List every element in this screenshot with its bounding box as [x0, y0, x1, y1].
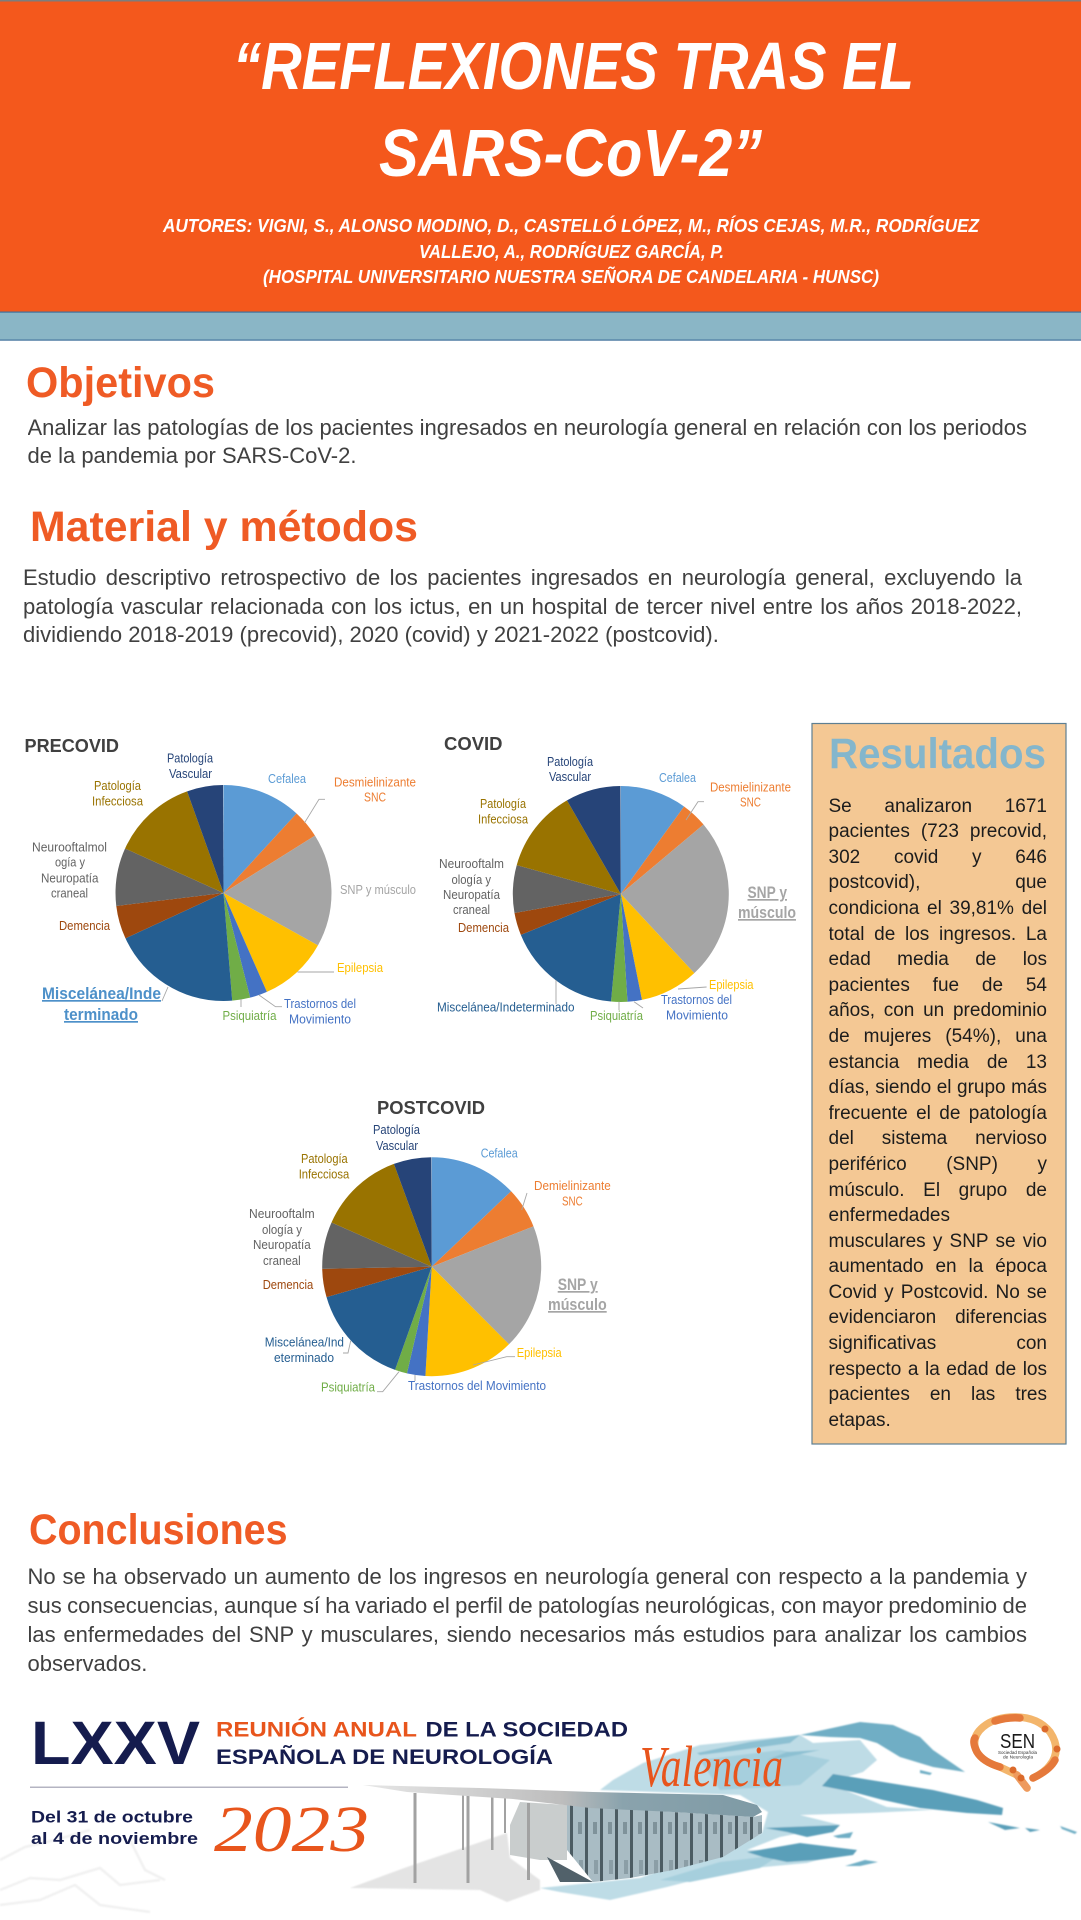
- text: resultados: años, con un predominio: [828, 1000, 1047, 1021]
- labels: covid: Infecciosa: [478, 813, 528, 827]
- text: resultados: del sistema nervioso: [828, 1128, 1047, 1149]
- text: objetivos: Analizar las patologías de los pacientes ingresados en neurología general en relación con los periodos: [28, 415, 1027, 440]
- text: resultados: postcovid), que: [828, 872, 1047, 893]
- labels: postcovid: Infecciosa: [299, 1168, 349, 1182]
- labels: precovid: Neurooftalmol: [32, 841, 107, 855]
- text: material y métodos: patología vascular relacionada con los ictus, en un hospital de tercer nivel entre los años 2018-2022,: [23, 594, 1022, 618]
- text: objetivos: [28, 414, 1027, 474]
- labels: covid: Neurooftalm: [439, 857, 504, 871]
- labels: precovid: Movimiento: [289, 1013, 351, 1027]
- text: conclusiones: [28, 1562, 1027, 1682]
- labels: covid: Trastornos del: [661, 993, 732, 1007]
- header banner: [0, 0, 1081, 341]
- text: resultados: estancia media de 13: [828, 1052, 1047, 1073]
- labels: postcovid: Demielinizante: [534, 1179, 611, 1193]
- labels: precovid: Vascular: [169, 767, 212, 781]
- text: conclusiones: sus consecuencias, aunque sí ha variado el perfil de patologías neurológicas, con mayor predominio de: [28, 1593, 1027, 1618]
- labels: precovid: Epilepsia: [337, 961, 383, 975]
- labels: precovid: Cefalea: [268, 772, 306, 786]
- chart title: postcovid: POSTCOVID: [377, 1097, 485, 1118]
- labels: precovid: Demencia: [59, 919, 110, 933]
- labels: covid: ología y: [452, 873, 492, 887]
- text: resultados: etapas.: [828, 1410, 891, 1431]
- text: resultados: 302 covid y 646: [828, 847, 1047, 868]
- labels: precovid: craneal: [51, 887, 88, 901]
- heading: Conclusiones: Conclusiones: [29, 1506, 288, 1554]
- labels: postcovid: Patología: [301, 1152, 348, 1166]
- dates: Del 31 de octubre: [31, 1808, 193, 1827]
- text: resultados: condiciona el 39,81% del: [828, 898, 1047, 919]
- decorative grey veins: [0, 1830, 165, 1912]
- text: resultados: respecto a la edad de los: [828, 1359, 1047, 1380]
- labels: precovid: SNP y músculo: [340, 883, 416, 897]
- text: conclusiones: observados.: [28, 1651, 147, 1676]
- labels: postcovid: ología y: [262, 1223, 303, 1237]
- chart title: covid: COVID: [444, 733, 502, 754]
- logo: SEN: [974, 1717, 1060, 1788]
- labels: covid: SNC: [740, 796, 761, 810]
- labels: postcovid: SNP y: [558, 1275, 598, 1294]
- text: material y métodos: Estudio descriptivo retrospectivo de los pacientes ingresados en neurología general, excluyendo la: [23, 565, 1022, 590]
- labels: postcovid: Psiquiatría: [321, 1381, 375, 1395]
- authors and hospital: [162, 215, 980, 287]
- labels: precovid: Psiquiatría: [222, 1009, 277, 1023]
- labels: postcovid: SNC: [562, 1195, 583, 1209]
- text: resultados: evidenciaron diferencias: [828, 1307, 1047, 1328]
- text: conclusiones: las enfermedades del SNP y musculares, siendo necesarios más estudios para analizar los cambios: [28, 1622, 1027, 1647]
- meeting name: REUNIÓN ANUAL: [216, 1718, 417, 1742]
- authors and hospital: VALLEJO, A., RODRÍGUEZ GARCÍA, P.: [419, 241, 724, 262]
- text: resultados: edad media de los: [828, 949, 1047, 970]
- labels: postcovid: craneal: [263, 1254, 301, 1268]
- text: resultados: músculo. El grupo de: [828, 1180, 1047, 1200]
- labels: covid: [437, 755, 796, 1023]
- labels: covid: SNP y: [748, 883, 787, 902]
- labels: postcovid: Neurooftalm: [249, 1207, 315, 1221]
- labels: covid: Patología: [480, 797, 526, 811]
- labels: precovid: Desmielinizante: [334, 776, 416, 790]
- labels: covid: Demencia: [458, 921, 509, 935]
- labels: covid: Neuropatía: [443, 888, 500, 902]
- text: resultados: pacientes (723 precovid,: [828, 821, 1047, 842]
- labels: covid: Psiquiatría: [590, 1009, 643, 1023]
- text: resultados: enfermedades: [828, 1205, 950, 1226]
- authors and hospital: AUTORES: VIGNI, S., ALONSO MODINO, D., CASTELLÓ LÓPEZ, M., RÍOS CEJAS, M.R., RODRÍGUEZ: [162, 215, 980, 236]
- heading: Objetivos: Objetivos: [26, 359, 215, 407]
- LXXV: LXXV: [31, 1709, 200, 1777]
- text: resultados: [828, 794, 1047, 1439]
- pie slices: covid: [567, 840, 675, 948]
- logo: SEN: de Neurología: [1003, 1754, 1034, 1760]
- text: resultados: de mujeres (54%), una: [828, 1026, 1047, 1047]
- labels: postcovid: Cefalea: [481, 1147, 518, 1161]
- heading: Resultados: Resultados: [829, 730, 1046, 778]
- labels: covid: Desmielinizante: [710, 781, 791, 795]
- meeting name: ESPAÑOLA DE NEUROLOGÍA: [216, 1746, 553, 1769]
- pie slices: precovid: [170, 839, 278, 947]
- labels: covid: Patología: [547, 755, 593, 769]
- labels: precovid: [32, 752, 416, 1027]
- leader lines: covid: [556, 802, 707, 1010]
- panel: resultados: [812, 724, 1066, 1444]
- logo: SEN: Sociedad Española: [998, 1750, 1037, 1755]
- labels: precovid: Patología: [94, 779, 141, 793]
- labels: covid: Epilepsia: [709, 978, 754, 992]
- dates: [31, 1808, 198, 1848]
- meeting name: DE LA SOCIEDAD: [426, 1719, 628, 1742]
- text: resultados: musculares y SNP se vio: [828, 1231, 1047, 1252]
- text: objetivos: de la pandemia por SARS-CoV-2.: [28, 443, 356, 468]
- text: resultados: periférico (SNP) y: [828, 1154, 1047, 1175]
- labels: precovid: Patología: [167, 752, 213, 766]
- labels: covid: Cefalea: [659, 771, 696, 785]
- labels: precovid: Miscelánea/Inde: [42, 984, 161, 1003]
- labels: covid: Movimiento: [666, 1009, 728, 1023]
- heading: Material y métodos: Material y métodos: [30, 503, 418, 551]
- chart: postcovid pie: [249, 1097, 611, 1395]
- footer: congress banner: [0, 1709, 1077, 1912]
- title: SARS-CoV-2”: [379, 116, 762, 191]
- Valencia script: Valencia: [640, 1734, 783, 1799]
- labels: postcovid: Patología: [373, 1123, 420, 1137]
- labels: postcovid: Demencia: [263, 1278, 313, 1292]
- text: resultados: pacientes en las tres: [828, 1384, 1047, 1405]
- labels: precovid: Trastornos del: [284, 997, 356, 1011]
- text: resultados: pacientes fue de 54: [828, 975, 1047, 996]
- text: conclusiones: No se ha observado un aumento de los ingresos en neurología general con respecto a la pandemia y: [28, 1564, 1027, 1589]
- title: [233, 29, 914, 191]
- text: resultados: Covid y Postcovid. No se: [828, 1282, 1047, 1303]
- chart: precovid pie: [24, 735, 416, 1027]
- labels: postcovid: Miscelánea/Ind: [265, 1336, 344, 1350]
- text: resultados: frecuente el de patología: [828, 1103, 1047, 1124]
- labels: precovid: ogía y: [55, 856, 86, 870]
- labels: precovid: Infecciosa: [92, 794, 143, 808]
- text: resultados: significativas con: [828, 1333, 1047, 1354]
- title: “REFLEXIONES TRAS EL: [233, 29, 914, 104]
- text: material y métodos: [23, 564, 1022, 654]
- labels: precovid: Neuropatía: [41, 871, 99, 885]
- labels: postcovid: Neuropatía: [253, 1238, 311, 1252]
- text: resultados: días, siendo el grupo más: [828, 1077, 1047, 1098]
- labels: postcovid: [249, 1123, 611, 1395]
- labels: covid: craneal: [453, 903, 490, 917]
- labels: covid: Vascular: [549, 770, 591, 784]
- labels: postcovid: eterminado: [274, 1351, 334, 1365]
- text: material y métodos: dividiendo 2018-2019 (precovid), 2020 (covid) y 2021-2022 (postcovid).: [23, 622, 719, 647]
- watercolor wash: [540, 1722, 1077, 1900]
- building: [350, 1785, 762, 1902]
- logo: SEN: SEN: [1000, 1731, 1035, 1753]
- labels: postcovid: Trastornos del Movimiento: [408, 1379, 546, 1393]
- labels: precovid: terminado: [64, 1005, 138, 1024]
- labels: precovid: SNC: [364, 791, 386, 805]
- chart title: precovid: PRECOVID: [24, 735, 119, 756]
- labels: covid: músculo: [738, 903, 796, 922]
- labels: covid: Miscelánea/Indeterminado: [437, 1001, 575, 1015]
- text: resultados: aumentado en la época: [828, 1256, 1047, 1277]
- leader lines: precovid: [162, 799, 334, 1007]
- labels: postcovid: Vascular: [376, 1139, 418, 1153]
- leader lines: postcovid: [343, 1193, 527, 1392]
- year script: 2023: [214, 1793, 369, 1866]
- chart: covid pie: [437, 733, 796, 1023]
- text: resultados: total de los ingresos. La: [828, 924, 1047, 945]
- labels: postcovid: Epilepsia: [517, 1346, 562, 1360]
- meeting name: [216, 1718, 628, 1769]
- authors and hospital: (HOSPITAL UNIVERSITARIO NUESTRA SEÑORA DE CANDELARIA - HUNSC): [263, 266, 879, 287]
- labels: postcovid: músculo: [548, 1295, 607, 1314]
- text: resultados: Se analizaron 1671: [828, 796, 1047, 817]
- pie slices: postcovid: [377, 1212, 486, 1321]
- dates: al 4 de noviembre: [31, 1829, 198, 1848]
